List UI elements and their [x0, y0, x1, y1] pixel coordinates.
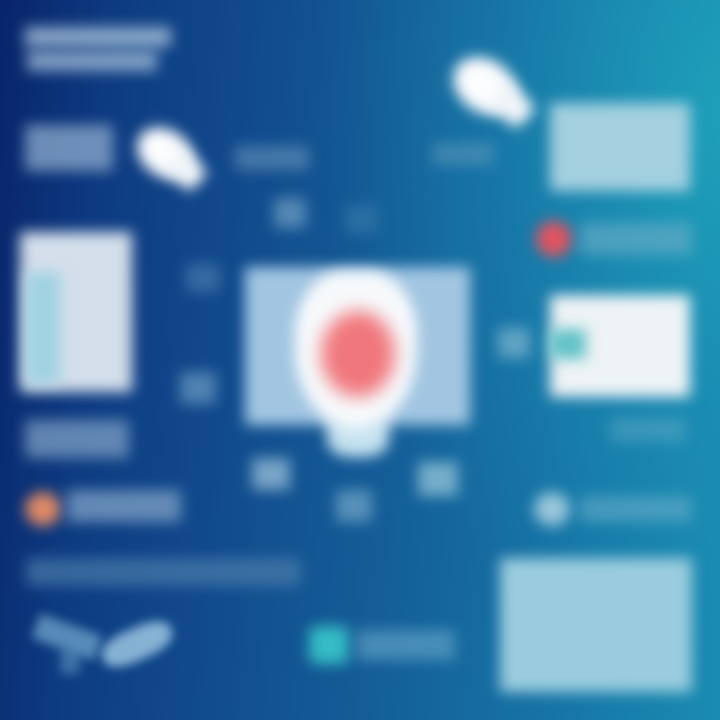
icon: world map [28, 610, 178, 678]
panel: left column [8, 220, 144, 404]
text block: lower left [16, 412, 138, 466]
alert row: upper right [526, 211, 698, 268]
text block: right below panel [610, 418, 686, 442]
icon: red alert dot [536, 221, 572, 257]
panel: lower right [500, 558, 692, 692]
monitor screen [245, 267, 470, 425]
icon row: lower centre teal badge with label [300, 617, 462, 673]
icon: small node lower left [252, 458, 290, 490]
icon: small node lower centre [336, 490, 372, 522]
text lines [580, 223, 692, 255]
icon row: right [526, 483, 698, 535]
icon: small node lower right [418, 462, 458, 496]
teal arrow [550, 329, 586, 359]
icon: cloud right [442, 46, 544, 137]
text line: lower left wide [26, 558, 301, 586]
accent column [26, 272, 60, 384]
icon: small node top right [345, 205, 377, 233]
panel: right middle [538, 284, 702, 408]
icon: cloud left [126, 116, 216, 200]
red core [321, 311, 395, 397]
panel: upper right [550, 103, 690, 191]
text block: upper left [16, 116, 122, 180]
heading: title block [16, 17, 180, 80]
central monitor with shield [234, 256, 480, 468]
icon: small node left upper [186, 264, 220, 292]
icon: small node right [498, 328, 530, 358]
text block: upper centre left [235, 146, 309, 170]
icon: small node left lower [180, 372, 216, 404]
icon row: orange badge with label [15, 482, 190, 536]
monitor stand [327, 415, 389, 457]
shield [295, 271, 417, 429]
text block: upper centre right [432, 143, 494, 165]
icon: small node top [274, 198, 306, 228]
